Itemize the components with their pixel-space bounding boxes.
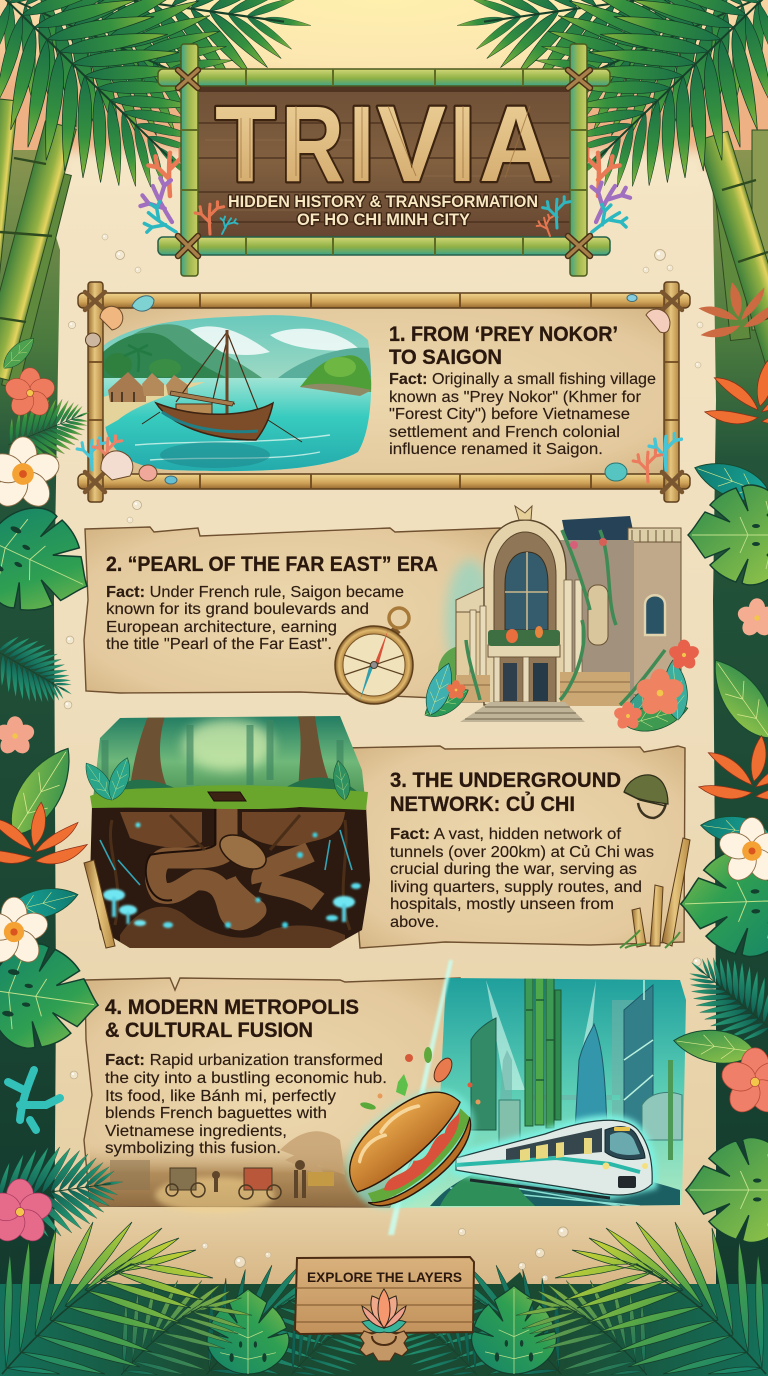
bamboo sticks: [620, 838, 690, 948]
panel 3: the underground network: [79, 714, 690, 950]
panel 2 parchment: [84, 527, 500, 700]
flower: heliconia: [0, 802, 87, 864]
fact 2: known for its grand boulevards and: [106, 601, 369, 618]
fact 3: tunnels (over 200km) at Củ Chi was: [390, 844, 654, 861]
fact 1: [389, 371, 656, 458]
illustration: banh mi: [328, 1047, 495, 1226]
illustration: old market street: [90, 1131, 390, 1213]
fact 1: settlement and French colonial: [389, 424, 620, 441]
left jungle strip: [0, 150, 60, 1290]
fact 2: Fact: Under French rule, Saigon became: [106, 584, 404, 601]
panel 3 parchment: [345, 746, 685, 948]
fact 2: [106, 584, 404, 653]
light beam: [388, 960, 453, 1235]
bamboo frame: [78, 282, 690, 502]
wooden plaque: [295, 1257, 474, 1334]
leaf: large monstera: [679, 845, 768, 959]
leaf: upper small palm: [0, 382, 102, 474]
wooden board: [196, 84, 572, 240]
icon: compass: [335, 608, 413, 704]
heading 3: NETWORK: CỦ CHI: [390, 792, 575, 816]
leaf: lower monstera: [686, 1138, 768, 1242]
heading 4: [105, 996, 359, 1042]
fact 4: blends French baguettes with: [105, 1105, 327, 1122]
illustration: futuristic city: [390, 978, 686, 1208]
panel 4 parchment: [84, 978, 460, 1207]
leaf: teal blade: [689, 453, 768, 510]
leaf: lower small palm: [0, 622, 87, 722]
title: TRIVIA: V: [377, 83, 446, 204]
fact 3: above.: [390, 914, 439, 931]
leaf: monstera: [688, 485, 768, 585]
fact 3: hospitals, mostly unseen from: [390, 896, 614, 913]
flower: peach blossom: [0, 716, 36, 757]
icon: lotus on gear: [360, 1289, 408, 1361]
fact 2: European architecture, earning: [106, 619, 337, 636]
heading 1: 1. FROM ‘PREY NOKOR’: [389, 323, 618, 346]
flower: plumeria: [0, 437, 63, 512]
left bamboo stalks: [0, 99, 76, 429]
panel 2: Pearl of the Far East: [84, 506, 701, 737]
flower: plumeria: [0, 897, 51, 968]
panel 1 backing: [95, 304, 667, 478]
flower: muted heliconia: [687, 270, 768, 344]
subtitle: [228, 193, 538, 229]
heading 4: & CULTURAL FUSION: [105, 1019, 313, 1042]
flower: peach blossom: [736, 598, 768, 639]
boat: [142, 330, 302, 442]
illustration: colonial opera house: [420, 506, 701, 737]
fact 4: [105, 1052, 387, 1157]
fact 1: "Forest City") before Vietnamese: [389, 406, 630, 423]
top palm fronds: [0, 0, 768, 246]
fact 4: the city into a bustling economic hub.: [105, 1070, 387, 1087]
right foliage: [667, 270, 768, 1243]
illustration: Cu Chi tunnel cross-section: [79, 714, 373, 950]
title: TRIVIA: A: [479, 83, 553, 204]
bamboo frame: [158, 44, 610, 276]
call to action: EXPLORE THE LAYERS: [307, 1269, 462, 1285]
heading 3: 3. THE UNDERGROUND: [390, 769, 621, 792]
flower: heliconia: [705, 361, 768, 424]
flower: lower heliconia: [699, 736, 768, 799]
leaf: dark palm: [667, 934, 768, 1059]
leaf: monstera: [0, 492, 109, 634]
coral: turquoise: [8, 1070, 60, 1130]
title: TRIVIA: I: [348, 83, 375, 204]
fact 1: known as "Prey Nokor" (Khmer for: [389, 389, 642, 406]
subtitle: OF HO CHI MINH CITY: [297, 211, 470, 229]
flower: hibiscus: [0, 1179, 56, 1247]
heading 3: [390, 769, 621, 816]
bottom palm fronds: [2, 1222, 766, 1375]
fact 1: influence renamed it Saigon.: [389, 441, 603, 458]
panel 4: modern metropolis: [84, 960, 690, 1235]
leaf: bright green: [0, 738, 85, 846]
leaf: lower teal blade: [699, 812, 768, 849]
leaf: palm spray: [0, 1135, 130, 1246]
fact 3: crucial during the war, serving as: [390, 861, 637, 878]
tunnel chamber: [214, 828, 272, 876]
title: TRIVIA: R: [281, 83, 344, 204]
leaf: pale green: [672, 1025, 757, 1068]
icon: army helmet: [624, 775, 668, 818]
fact 1: Fact: Originally a small fishing village: [389, 371, 656, 388]
fact 4: Fact: Rapid urbanization transformed: [105, 1052, 383, 1069]
flower: plumeria: [716, 817, 768, 886]
fact 4: symbolizing this fusion.: [105, 1140, 281, 1157]
heading 2: 2. “PEARL OF THE FAR EAST” ERA: [106, 553, 438, 576]
heading 4: 4. MODERN METROPOLIS: [105, 996, 359, 1019]
plank grain on letters: [241, 106, 530, 178]
heading 1: TO SAIGON: [389, 346, 502, 369]
flower: coral bloom: [3, 368, 57, 420]
title: TRIVIA: [215, 83, 553, 204]
metro train: [456, 1118, 654, 1198]
bottom jungle band: [0, 1265, 768, 1376]
fact 4: Vietnamese ingredients,: [105, 1123, 287, 1140]
leaf: teal blade: [5, 881, 81, 926]
shells, stones and corals: [77, 294, 681, 484]
small board corals: [195, 197, 570, 239]
left foliage: [0, 333, 130, 1247]
title corals: [133, 149, 633, 246]
right bamboo stalks: [697, 130, 768, 399]
fact 4: Its food, like Bánh mi, perfectly: [105, 1088, 336, 1105]
title: TRIVIA: I: [449, 83, 476, 204]
heading 1: [389, 323, 618, 369]
right jungle strip: [712, 150, 768, 1290]
fact 3: [390, 826, 654, 931]
title: TRIVIA: T: [215, 83, 276, 204]
flower: hibiscus: [718, 1048, 768, 1118]
illustration: fishing boat in bay: [100, 312, 375, 477]
subtitle: HIDDEN HISTORY & TRANSFORMATION: [228, 193, 538, 211]
leaf: bright green: [700, 650, 768, 749]
footer sign: [295, 1257, 474, 1361]
fact 2: the title "Pearl of the Far East".: [106, 636, 332, 653]
leaf: pale leaf: [0, 333, 39, 374]
fact 3: Fact: A vast, hidden network of: [390, 826, 622, 843]
fact 3: living quarters, supply routes, and: [390, 879, 642, 896]
title sign: [133, 44, 633, 276]
leaf: large monstera: [0, 938, 105, 1057]
panel 1: from Prey Nokor to Saigon: [77, 282, 690, 502]
water droplets: [64, 234, 703, 1281]
